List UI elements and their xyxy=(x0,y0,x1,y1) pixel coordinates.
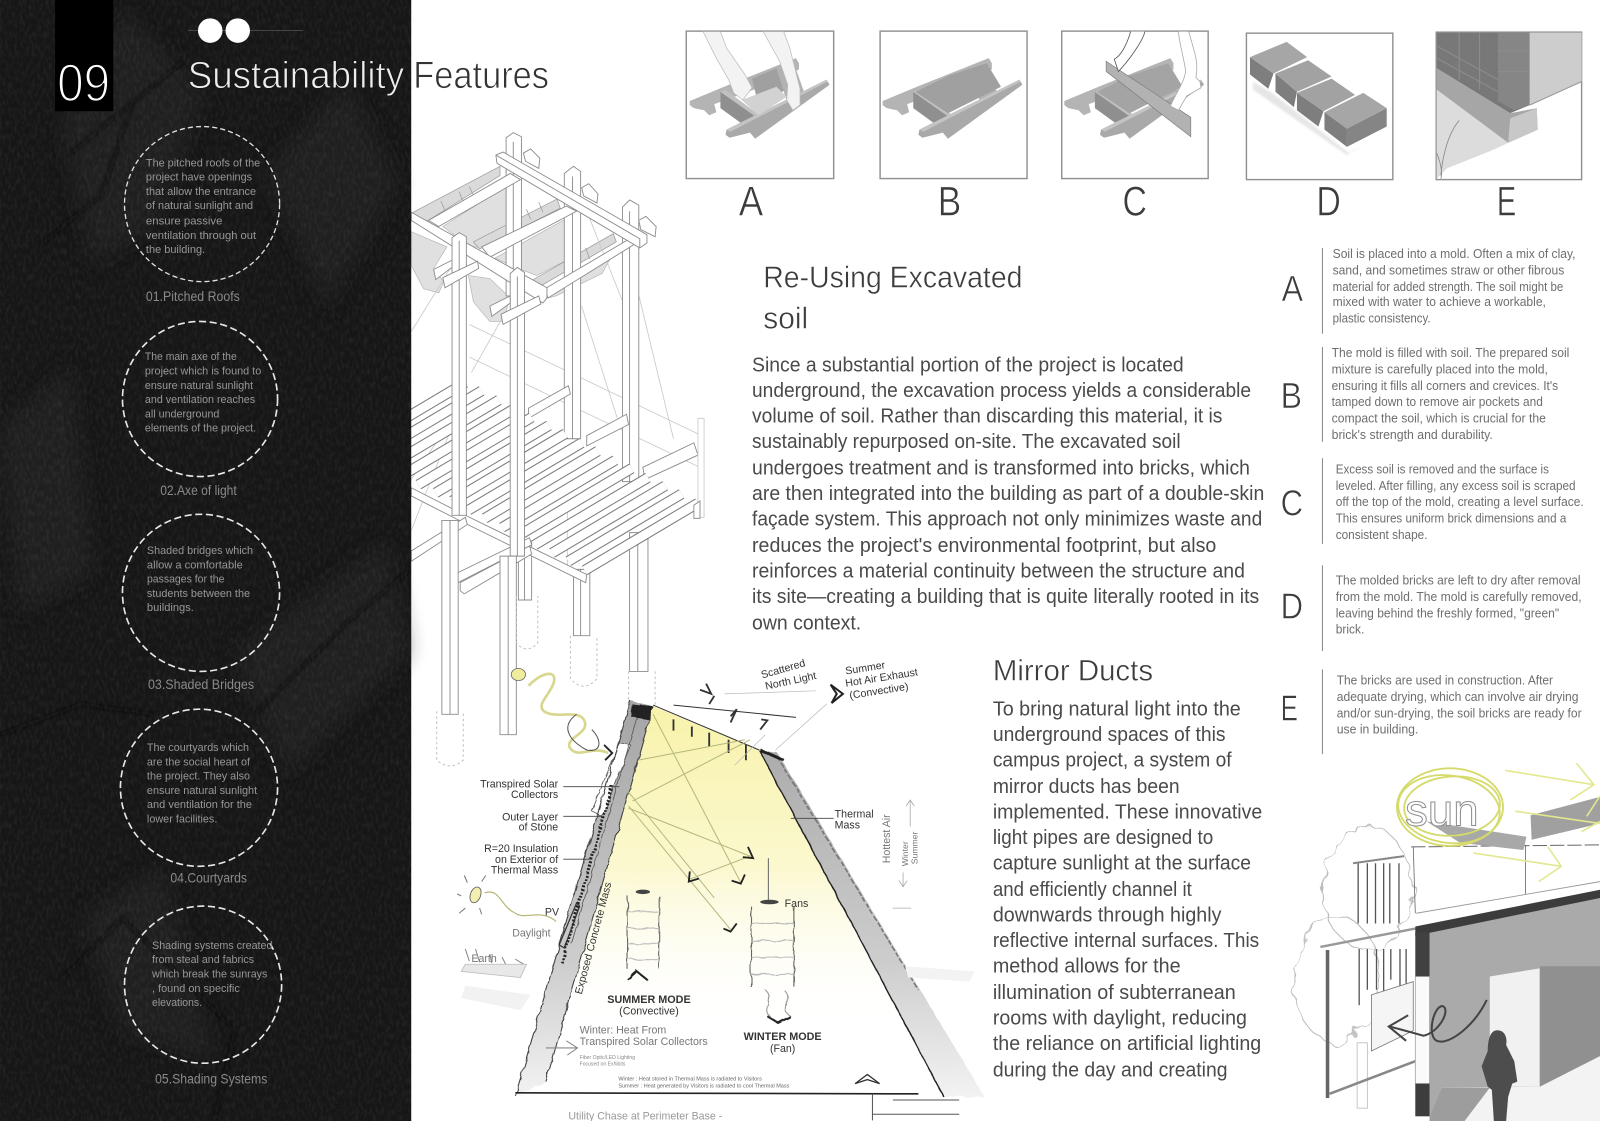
title: Features xyxy=(413,54,549,96)
step B description xyxy=(1281,346,1569,442)
feature 01: pitched roofs: 01.Pitched Roofs xyxy=(146,289,240,304)
number block 09: 09 xyxy=(57,54,110,113)
text block: re-using excavated soil: reduces the project's environmental footprint, but also xyxy=(752,535,1216,557)
section labels: SUMMER MODE xyxy=(607,994,691,1006)
feature 02: axe of light: project which is found to xyxy=(145,365,261,377)
step D description: The molded bricks are left to dry after removal xyxy=(1336,574,1581,588)
section labels: PV xyxy=(545,906,560,918)
post brackets xyxy=(523,149,656,237)
step A description: material for added strength. The soil might be xyxy=(1333,280,1563,294)
section labels: WINTER MODE xyxy=(744,1031,822,1043)
left wall pieces xyxy=(1415,933,1430,977)
tree trunk xyxy=(1357,1043,1367,1108)
front posts xyxy=(442,233,524,735)
feature 05: shading systems: 05.Shading Systems xyxy=(155,1072,268,1087)
feature 04: courtyards: ensure natural sunlight xyxy=(147,785,258,797)
canopy fabric drapes xyxy=(411,180,612,321)
feature 01: pitched roofs: that allow the entrance xyxy=(146,186,256,198)
step A description: sand, and sometimes straw or other fibrous xyxy=(1333,263,1564,277)
title: Sustainability xyxy=(188,54,404,96)
section labels: (Convective) xyxy=(849,681,909,702)
feature 01: pitched roofs: the building. xyxy=(146,244,205,256)
feature 02: axe of light: all underground xyxy=(145,408,219,420)
section leader lines xyxy=(563,787,834,859)
feature 02: axe of light: ensure natural sunlight xyxy=(145,380,254,392)
heading: re-using excavated soil xyxy=(763,261,1022,336)
title xyxy=(188,54,549,96)
passive section sketch xyxy=(457,657,985,1121)
step C illustration: scraping excess soil xyxy=(1062,31,1208,179)
feature 01: pitched roofs: project have openings xyxy=(146,172,252,184)
left wall xyxy=(515,701,653,1096)
feature 03: shaded bridges: buildings. xyxy=(147,602,194,614)
cables xyxy=(411,211,704,571)
step B illustration: mold filled with soil xyxy=(880,31,1027,179)
feature 05: shading systems: , found on specific xyxy=(152,983,240,995)
black roof edge xyxy=(1415,890,1600,936)
step B description: ensuring it fills all corners and crevices. It's xyxy=(1332,379,1558,393)
step A illustration: hands placing soil in mold xyxy=(686,31,834,179)
feature 04: courtyards: and ventilation for the xyxy=(147,799,252,811)
feature 01: pitched roofs: The pitched roofs of the xyxy=(146,157,260,169)
dark crumpled side panel xyxy=(0,0,411,1121)
section labels: Fiber Optic/LED Lighting xyxy=(580,1055,635,1061)
step letters: B xyxy=(938,177,961,224)
dashed pile foundations xyxy=(437,596,655,766)
step C description: Excess soil is removed and the surface is xyxy=(1336,462,1549,476)
step E description: E xyxy=(1281,688,1298,728)
text block: re-using excavated soil xyxy=(752,354,1264,635)
step C description: This ensures uniform brick dimensions and a xyxy=(1336,511,1566,525)
feature 02: axe of light: and ventilation reaches xyxy=(145,394,255,406)
step A description: A xyxy=(1282,269,1303,309)
text block: re-using excavated soil: reinforces a material continuity between the structure and xyxy=(752,561,1245,583)
text block: mirror ducts: mirror ducts has been xyxy=(993,776,1180,798)
section labels xyxy=(471,657,919,1121)
floor line and air arrows xyxy=(515,800,959,1120)
roof skylight line with arrows xyxy=(653,684,843,765)
section labels: R=20 Insulation xyxy=(484,843,558,855)
fan discs xyxy=(636,890,779,904)
step letters xyxy=(739,177,1516,224)
step E description: The bricks are used in construction. After xyxy=(1337,674,1553,688)
light ray bounces xyxy=(628,714,750,930)
step letters: D xyxy=(1316,177,1341,224)
feature 04: courtyards: The courtyards which xyxy=(147,742,249,754)
feature 01: pitched roofs: ventilation through out xyxy=(146,230,257,242)
text block: re-using excavated soil: are then integrated into the building as part of a double-skin xyxy=(752,483,1264,505)
text block: re-using excavated soil: volume of soil. Rather than discarding this material, it is xyxy=(752,405,1222,427)
feature 02: axe of light: elements of the project. xyxy=(145,423,256,435)
text block: mirror ducts: downwards through highly xyxy=(993,904,1222,926)
deck beams xyxy=(411,488,700,594)
section labels: Transpired Solar xyxy=(480,779,559,791)
sun label with rings: sun xyxy=(1405,784,1479,835)
section labels: Fans xyxy=(785,898,808,910)
bright opening xyxy=(1490,968,1540,1087)
text block: mirror ducts: reflective internal surfaces. This xyxy=(993,930,1259,952)
feature 02: axe of light xyxy=(122,321,278,498)
section labels: (Convective) xyxy=(619,1005,679,1017)
feature 04: courtyards xyxy=(120,709,278,886)
feature 02: axe of light: The main axe of the xyxy=(145,351,237,363)
slab and frame xyxy=(1320,845,1600,1098)
text block: re-using excavated soil: underground, the excavation process yields a considerable xyxy=(752,380,1251,402)
section labels: Hottest Air xyxy=(881,814,893,863)
sun label with rings xyxy=(1394,768,1504,850)
text block: mirror ducts: capture sunlight at the surface xyxy=(993,852,1251,874)
front post stubs xyxy=(434,260,541,324)
step letters: A xyxy=(739,177,763,224)
step B description: brick's strength and durability. xyxy=(1332,428,1493,442)
text block: re-using excavated soil: its site—creating a building that is quite literally rooted in its xyxy=(752,586,1259,608)
section labels: Thermal xyxy=(835,808,874,820)
section labels: Mass xyxy=(835,820,860,832)
back posts xyxy=(506,133,648,671)
section labels: of Stone xyxy=(519,822,558,834)
step C description xyxy=(1281,458,1584,544)
number block 09 xyxy=(55,0,113,113)
feature 04: courtyards: are the social heart of xyxy=(147,756,251,768)
top long and cross beams xyxy=(411,152,647,303)
ray arrow tips xyxy=(689,847,753,932)
section labels: Winter xyxy=(900,841,910,866)
sun squiggle xyxy=(511,668,612,760)
step D description: from the mold. The mold is carefully removed, xyxy=(1336,590,1582,604)
section labels: Thermal Mass xyxy=(491,864,558,876)
feature 04: courtyards: 04.Courtyards xyxy=(170,871,247,886)
section labels: (Fan) xyxy=(770,1043,795,1055)
tree outline xyxy=(1294,827,1412,1043)
step B description: tamped down to remove air pockets and xyxy=(1332,395,1543,409)
feature 02: axe of light: 02.Axe of light xyxy=(160,483,237,498)
deck planks xyxy=(352,383,698,570)
feature 01: pitched roofs xyxy=(125,127,280,304)
step A description: mixed with water to achieve a workable, xyxy=(1333,295,1546,309)
text block: mirror ducts: the reliance on artificial lighting xyxy=(993,1033,1261,1055)
step A description: plastic consistency. xyxy=(1333,311,1431,325)
section labels: Summer xyxy=(845,659,886,677)
step E description: and/or sun-drying, the soil bricks are ready for xyxy=(1337,706,1582,720)
heading: re-using excavated soil: soil xyxy=(763,302,808,336)
text block: mirror ducts: and efficiently channel it xyxy=(993,879,1192,901)
step C description: C xyxy=(1281,483,1303,523)
section labels: Outer Layer xyxy=(502,811,559,823)
feature 04: courtyards: the project. They also xyxy=(147,771,250,783)
section labels: Daylight xyxy=(512,928,551,940)
text block: re-using excavated soil: own context. xyxy=(752,613,861,635)
feature 05: shading systems: Shading systems created xyxy=(152,940,272,952)
text block: re-using excavated soil: sustainably repurposed on-site. The excavated soil xyxy=(752,431,1181,453)
text block: re-using excavated soil: façade system. This approach not only minimizes waste and xyxy=(752,509,1262,531)
text block: mirror ducts: To bring natural light into the xyxy=(993,698,1241,720)
small sun and earth xyxy=(457,875,974,1010)
feature 01: pitched roofs: ensure passive xyxy=(146,215,222,227)
yellow light volume xyxy=(559,706,918,1031)
feature 05: shading systems: from steal and fabrics xyxy=(152,954,254,966)
text block: mirror ducts: rooms with daylight, reducing xyxy=(993,1007,1247,1029)
feature 03: shaded bridges: allow a comfortable xyxy=(147,559,243,571)
step C description: consistent shape. xyxy=(1336,528,1428,542)
section labels: Transpired Solar Collectors xyxy=(580,1036,708,1048)
step descriptions xyxy=(1281,247,1584,754)
heading: re-using excavated soil: Re-Using Excavated xyxy=(763,261,1022,295)
section labels: on Exterior of xyxy=(495,854,558,866)
step letters: E xyxy=(1497,177,1516,224)
corner sketch: mirror duct building section xyxy=(1294,763,1600,1121)
text block: mirror ducts xyxy=(993,698,1262,1082)
feature 05: shading systems xyxy=(125,906,282,1087)
text block: mirror ducts: underground spaces of this xyxy=(993,724,1226,746)
section labels: Scattered xyxy=(760,657,807,681)
text block: mirror ducts: method allows for the xyxy=(993,955,1181,977)
feature 03: shaded bridges: 03.Shaded Bridges xyxy=(148,677,254,692)
feature 04: courtyards: lower facilities. xyxy=(147,813,217,825)
step E description: use in building. xyxy=(1337,723,1418,737)
feature 03: shaded bridges: passages for the xyxy=(147,574,225,586)
step D illustration: row of drying bricks xyxy=(1246,33,1393,180)
text block: re-using excavated soil: Since a substantial portion of the project is located xyxy=(752,354,1184,376)
feature 03: shaded bridges: students between the xyxy=(147,588,250,600)
section labels: Collectors xyxy=(511,789,558,801)
section labels: Hot Air Exhaust xyxy=(845,666,919,690)
step C description: off the top of the mold, creating a level surface. xyxy=(1336,495,1584,509)
step B description: The mold is filled with soil. The prepared soil xyxy=(1332,346,1569,360)
step D description xyxy=(1281,565,1582,651)
step E description xyxy=(1281,669,1582,754)
section labels: Earth xyxy=(471,953,497,965)
step E description: adequate drying, which can involve air drying xyxy=(1337,690,1579,704)
feature 03: shaded bridges: Shaded bridges which xyxy=(147,545,253,557)
glazed bay xyxy=(1371,982,1413,1051)
floor xyxy=(1430,1056,1600,1121)
curling arrow xyxy=(1389,1000,1487,1042)
dark back wall xyxy=(1540,966,1600,1087)
step B description: mixture is carefully placed into the mold, xyxy=(1332,362,1548,376)
section labels: North Light xyxy=(764,670,817,693)
fan stacks xyxy=(628,896,794,1022)
section labels: Exposed Concrete Mass xyxy=(573,881,614,996)
text block: mirror ducts: illumination of subterranean xyxy=(993,982,1236,1004)
step D description: leaving behind the freshly formed, "green" xyxy=(1336,606,1559,620)
heading: mirror ducts: Mirror Ducts xyxy=(993,655,1153,688)
text block: mirror ducts: campus project, a system of xyxy=(993,749,1232,771)
person silhouette xyxy=(1482,1030,1517,1121)
feature 05: shading systems: elevations. xyxy=(152,997,202,1009)
interior wall xyxy=(1430,897,1600,1121)
isometric timber canopy drawing xyxy=(352,133,704,766)
step E illustration: brick wall in construction xyxy=(1436,32,1582,180)
right wall xyxy=(759,750,985,1097)
section labels: Summer xyxy=(909,831,919,864)
header dots xyxy=(188,18,303,43)
step D description: brick. xyxy=(1336,623,1364,637)
text block: mirror ducts: during the day and creating xyxy=(993,1060,1228,1082)
rolled fabric strips xyxy=(411,166,616,285)
section labels: Winter: Heat From xyxy=(580,1025,666,1037)
step B description: compact the soil, which is crucial for the xyxy=(1332,411,1546,425)
step A description xyxy=(1282,247,1575,334)
feature 01: pitched roofs: of natural sunlight and xyxy=(146,200,253,212)
section labels: Winter : Heat stored in Thermal Mass is radiated to Visitors xyxy=(618,1077,762,1083)
fan drop line xyxy=(767,858,769,900)
roof overhangs xyxy=(1427,821,1527,850)
step letters: C xyxy=(1122,177,1147,224)
feature 05: shading systems: which break the sunrays xyxy=(151,969,268,981)
text block: re-using excavated soil: undergoes treatment and is transformed into bricks, which xyxy=(752,457,1250,479)
section labels: Summer : Heat generated by Visitors is radiated to cool Thermal Mass xyxy=(618,1084,790,1090)
step D description: D xyxy=(1281,586,1303,626)
text block: mirror ducts: implemented. These innovative xyxy=(993,801,1262,823)
yellow sun arrows xyxy=(1473,763,1600,882)
section labels: Focused on Exhibits xyxy=(580,1061,626,1067)
step B description: B xyxy=(1281,376,1302,416)
facade fins xyxy=(1353,856,1406,1010)
feature 03: shaded bridges xyxy=(122,514,280,692)
back rails xyxy=(529,386,704,517)
text block: mirror ducts: light pipes are designed to xyxy=(993,827,1213,849)
step A description: Soil is placed into a mold. Often a mix of clay, xyxy=(1333,247,1575,261)
step C description: leveled. After filling, any excess soil is scraped xyxy=(1336,479,1576,493)
